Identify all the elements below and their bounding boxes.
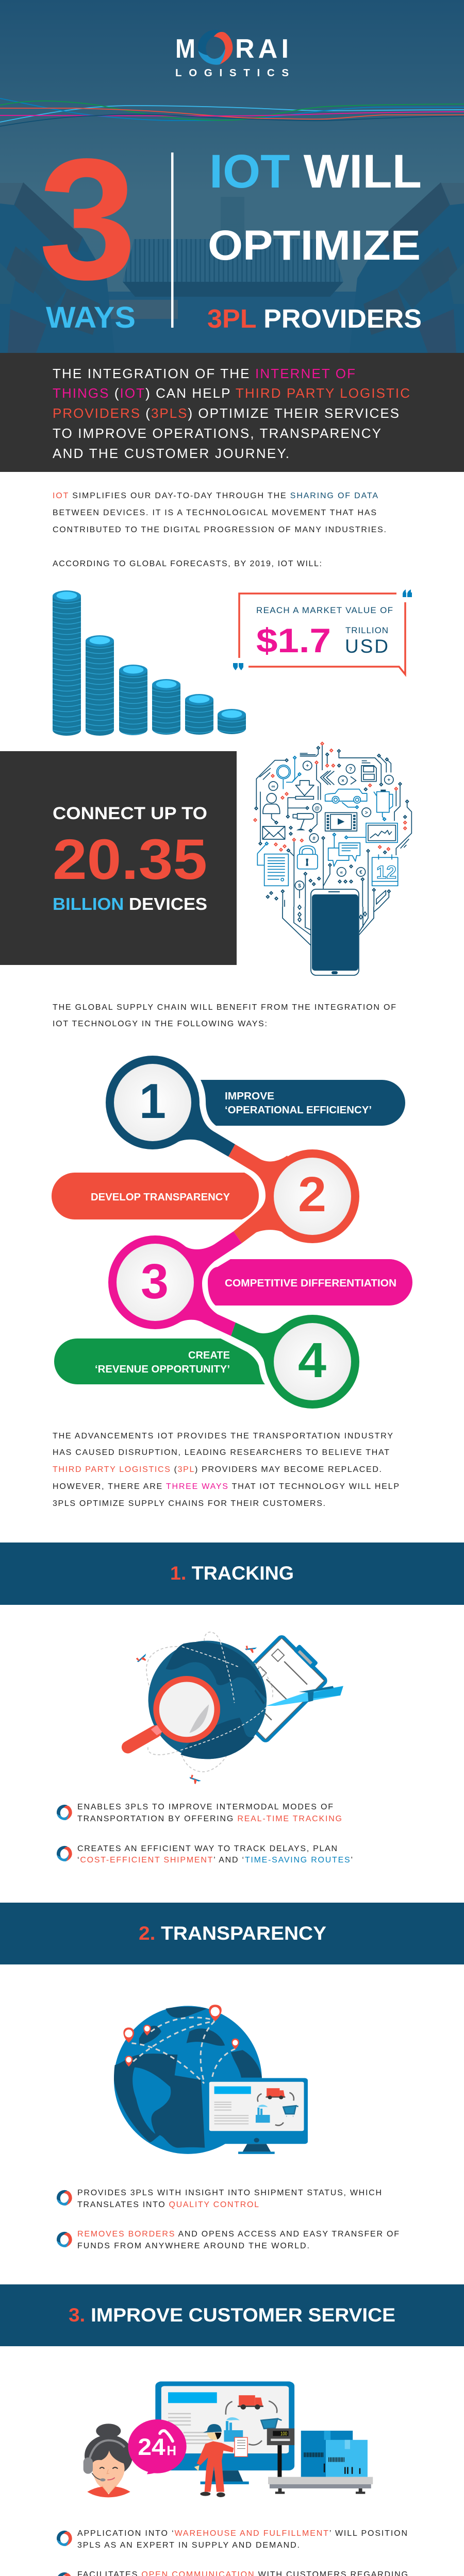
vertical divider [171,152,173,328]
panel: intro band: PROVIDERS (3PLS) OPTIMIZE THEIR SERVICES [53,405,399,421]
logo: Morai Logistics [175,30,289,79]
bullets: transparency [57,2189,399,2250]
pill 1 [201,1080,405,1126]
circuit icons: $ [298,883,301,889]
step 4: 4 [298,1333,326,1388]
monitor [205,2078,308,2154]
bullet text 1: APPLICATION INTO ‘WAREHOUSE AND FULFILLMENT’ WILL POSITION [77,2529,407,2538]
icon: map pins [123,2005,239,2066]
icon: bullet [57,2531,72,2546]
panel: intro band: THE INTEGRATION OF THE INTERNET OF [53,366,355,381]
step 4 [266,1315,359,1409]
circuit icons: ∞ [271,784,275,789]
banner: 1. Tracking: 1. TRACKING [170,1563,294,1584]
banner: 2. Transparency: 2. TRANSPARENCY [139,1923,326,1944]
globe [114,2006,262,2154]
title [207,145,422,333]
bullet text 1 [77,2529,407,2550]
pill 3: COMPETITIVE DIFFERENTIATION [225,1278,396,1289]
text block: disruption [53,1432,399,1508]
pill 1: IMPROVE [225,1091,274,1102]
text block: disruption: THIRD PARTY LOGISTICS (3PL) PROVIDERS MAY BECOME REPLACED. [53,1465,382,1474]
text block: supply chain intro: THE GLOBAL SUPPLY CHAIN WILL BENEFIT FROM THE INTEGRATION OF [53,1003,396,1012]
icon: bullet [57,2572,72,2576]
title: IOT WILL [209,145,422,198]
bullets: tracking [57,1803,353,1865]
panel: intro band: AND THE CUSTOMER JOURNEY. [53,446,289,461]
panel: intro band: TO IMPROVE OPERATIONS, TRANSPARENCY [53,426,381,441]
connector 1 [153,1092,235,1157]
circuit icons: × [341,778,344,784]
circuit icons: ? [349,767,352,772]
pill 2: DEVELOP TRANSPARENCY [91,1192,230,1203]
step 1 [106,1056,200,1149]
banner: 3. Improve customer service: 3. IMPROVE CUSTOMER SERVICE [69,2304,395,2326]
panel: intro band: THINGS (IOT) CAN HELP THIRD PARTY LOGISTIC [53,385,410,401]
dashed routes over globe [180,1642,267,1750]
connector 3 [155,1231,242,1336]
bullet text 1: TRANSLATES INTO QUALITY CONTROL [77,2200,259,2209]
bullet text 2: ‘COST-EFFICIENT SHIPMENT’ AND ‘TIME-SAVING ROUTES’ [77,1856,353,1865]
banner: 2. Transparency [0,1903,464,1964]
text block: IoT explanation: ACCORDING TO GLOBAL FORECASTS, BY 2019, IOT WILL: [53,560,322,568]
icon: truck [266,2088,285,2099]
dashed flight routes behind [146,1632,273,1772]
bullet text 1: ENABLES 3PLS TO IMPROVE INTERMODAL MODES OF [77,1803,333,1811]
pill 4: ‘REVENUE OPPORTUNITY’ [95,1364,230,1375]
circuit icons: + [306,764,309,769]
title: 3PL PROVIDERS [207,304,422,333]
connector 2 [228,1144,312,1243]
logo: Morai Logistics: RAI [235,34,289,64]
callout: market value: REACH A MARKET VALUE OF [256,605,393,615]
circuit icons: « [340,870,343,875]
bullet text 2: CREATES AN EFFICIENT WAY TO TRACK DELAYS, PLAN [77,1844,337,1853]
bullet text 1 [77,2189,382,2209]
clipboard [218,1630,333,1744]
text block: IoT explanation: IOT SIMPLIFIES OUR DAY-TO-DAY THROUGH THE SHARING OF DATA [53,492,378,500]
icon: bullet [57,2190,72,2206]
callout: market value: TRILLION [345,625,388,635]
bubble: 24H: 24 [138,2434,165,2460]
globe [148,1641,267,1759]
circuit icons: 12 [376,862,396,883]
WAYS: WAYS [46,301,136,334]
pill 4: CREATE [188,1350,230,1361]
icon: bullet [57,1846,72,1861]
text block: IoT explanation: CONTRIBUTED TO THE DIGITAL PROGRESSION OF MANY INDUSTRIES. [53,526,386,534]
text block: disruption: HAS CAUSED DISRUPTION, LEADING RESEARCHERS TO BELIEVE THAT [53,1448,389,1457]
banner: 1. Tracking [0,1543,464,1605]
connector 4 [231,1323,312,1387]
icon: planes [135,1646,257,1786]
monitor [155,2381,294,2484]
weighing scale with boxes [267,2428,373,2494]
text block: disruption: HOWEVER, THERE ARE THREE WAYS THAT IOT TECHNOLOGY WILL HELP [53,1482,399,1491]
bullet text 2 [77,2230,399,2250]
big number 3: 3 [39,123,137,315]
bullet text 1: TRANSPORTATION BY OFFERING REAL-TIME TRACKING [77,1815,342,1823]
icon: factory [256,2105,270,2123]
icon: cart [283,2106,299,2116]
bullets: customer service [57,2529,408,2576]
step 3: 3 [141,1254,169,1309]
text block: IoT explanation: BETWEEN DEVICES. IT IS A TECHNOLOGICAL MOVEMENT THAT HAS [53,509,376,517]
bullet text 1 [77,1803,342,1823]
diagram: four benefits [52,1056,412,1409]
circuit icons: + [387,777,390,783]
circuit icons: € [359,870,362,875]
diamonds [254,742,406,851]
icon: factory [224,2417,243,2442]
circuit icons [254,742,411,907]
pen [267,1686,343,1706]
pill 1: ‘OPERATIONAL EFFICIENCY’ [225,1105,372,1116]
bullet text 1: 3PLS AS AN EXPERT IN SUPPLY AND DEMAND. [77,2541,300,2550]
logo: Morai Logistics: LOGISTICS [175,67,289,79]
icon: truck [238,2395,263,2410]
circuit icons: @ [314,806,320,811]
step 3 [108,1235,202,1329]
pill 3 [208,1259,412,1306]
cycle arrows [257,2093,294,2126]
woman [84,2424,132,2497]
logo: Morai Logistics: M [175,34,195,64]
illustration: globe with monitor [114,2005,308,2154]
hero photo background [0,0,464,353]
title: OPTIMIZE [208,222,421,269]
woman with headset and 24h bubble [84,2419,247,2497]
bullet text 2: REMOVES BORDERS AND OPENS ACCESS AND EASY TRANSFER OF [77,2230,399,2239]
callout: market value [233,589,412,674]
circuit icons: > [365,810,368,816]
icon: bullet [57,2232,72,2247]
callout: market value: $1.7 [256,621,331,659]
text block: disruption: THE ADVANCEMENTS IOT PROVIDES THE TRANSPORTATION INDUSTRY [53,1432,393,1440]
callout: market value: USD [345,636,388,657]
lower traces [283,907,380,945]
text block: IoT explanation [53,492,386,568]
worker [194,2424,247,2497]
illustration: customer service [84,2381,373,2497]
icon: circuit light bulb with phone [254,742,411,975]
bullet text 1: PROVIDES 3PLS WITH INSIGHT INTO SHIPMENT STATUS, WHICH [77,2189,382,2197]
banner: 3. Improve customer service [0,2284,464,2346]
pill 4 [54,1338,265,1384]
chart: coin stacks [53,590,246,736]
icon: cart [261,2419,281,2429]
illustration: globe and magnifier [128,1630,343,1786]
panel: connect devices: CONNECT UP TO [53,804,207,823]
bullet text 2: FUNDS FROM ANYWHERE AROUND THE WORLD. [77,2242,309,2250]
bubble: 24H [128,2419,187,2474]
bullet text 2 [77,1844,353,1865]
bubble: 24H: H [167,2443,176,2459]
panel: connect devices: 20.35 [53,828,207,891]
magnifier [128,1679,217,1747]
pill 2 [52,1173,259,1219]
icon: bullet [57,1805,72,1820]
panel: intro band [0,353,464,472]
scale reading: 100 [280,2431,287,2437]
text block: disruption: 3PLS OPTIMIZE SUPPLY CHAINS FOR THEIR CUSTOMERS. [53,1499,325,1508]
step 2: 2 [298,1167,326,1222]
phone [311,889,359,975]
coloured wave lines [0,98,464,126]
text block: supply chain intro: IOT TECHNOLOGY IN THE FOLLOWING WAYS: [53,1020,267,1028]
circuit icons: # [312,836,316,841]
panel: hero [0,0,464,353]
dashed routes [131,2018,235,2083]
panel: connect devices [0,751,237,965]
step 2 [266,1149,359,1243]
panel: connect devices: BILLION DEVICES [53,894,207,913]
step 1: 1 [139,1074,166,1129]
text block: supply chain intro [53,1003,396,1028]
